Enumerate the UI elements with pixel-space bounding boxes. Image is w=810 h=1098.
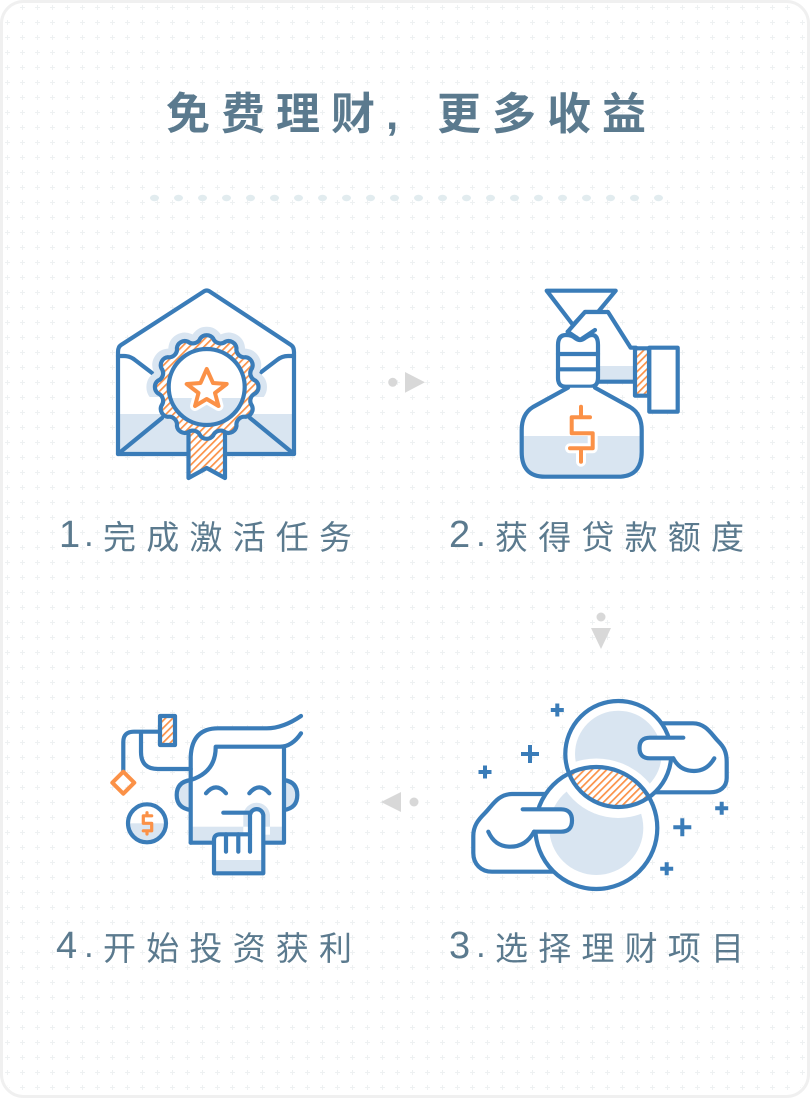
- label: step 1: .: [84, 515, 94, 554]
- cuff: [635, 348, 649, 396]
- left finger: [523, 809, 572, 832]
- hatched tag: [160, 716, 175, 745]
- rosette halo: [146, 326, 267, 397]
- bag neck: [558, 335, 598, 387]
- icon: dollar sign: [570, 407, 593, 462]
- icon: man with finger on lips: [112, 716, 301, 873]
- circle A: [565, 701, 671, 807]
- rosette: [155, 335, 258, 439]
- label: step 4: 4: [56, 925, 77, 967]
- icon: money bag in hand: [522, 291, 678, 477]
- label: step 4: 开始投资获利: [103, 930, 362, 967]
- envelope body: [118, 290, 294, 454]
- title: 更多收益: [437, 90, 657, 139]
- circle B: [535, 767, 657, 889]
- wires: [123, 732, 191, 771]
- icon: star: [187, 369, 227, 406]
- icon: two hands with overlapping circles: [473, 690, 728, 898]
- arrow: step 3 to 4: [381, 792, 418, 812]
- dotted divider: [150, 195, 663, 201]
- label: step 2: .: [476, 515, 486, 554]
- medal centre: [169, 349, 245, 425]
- arm: [568, 312, 635, 382]
- label: step 1: 1: [59, 514, 80, 556]
- title: ,: [386, 90, 398, 139]
- label: step 3: .: [476, 926, 486, 965]
- arrow: step 2 to 3: [591, 612, 611, 649]
- label: step 4: .: [84, 926, 94, 965]
- sparkles: [478, 704, 728, 875]
- icon: envelope with rosette: [118, 290, 294, 478]
- label: step 3: 3: [449, 925, 470, 967]
- label: step 2: 获得贷款额度: [495, 519, 754, 556]
- eyes: [206, 787, 269, 793]
- diamond: [112, 772, 134, 794]
- overlap lens: [572, 769, 646, 805]
- title: [166, 90, 657, 139]
- arrow: step 1 to 2: [388, 372, 425, 393]
- right hand: [655, 723, 727, 792]
- title: 免费理财: [166, 90, 386, 139]
- label: step 2: 2: [449, 514, 470, 556]
- right finger: [640, 738, 683, 758]
- ears: [177, 780, 191, 810]
- hand: [214, 809, 263, 873]
- sleeve: [649, 348, 678, 412]
- funnel: [547, 291, 616, 325]
- left hand: [473, 794, 556, 872]
- hair and face outline: [191, 716, 301, 843]
- face: [191, 728, 284, 843]
- label: step 3: 选择理财项目: [495, 930, 754, 967]
- coin: [127, 804, 167, 844]
- mouth: [223, 811, 250, 815]
- label: step 1: 完成激活任务: [103, 519, 362, 556]
- bag body: [522, 388, 642, 477]
- ribbon: [188, 425, 225, 478]
